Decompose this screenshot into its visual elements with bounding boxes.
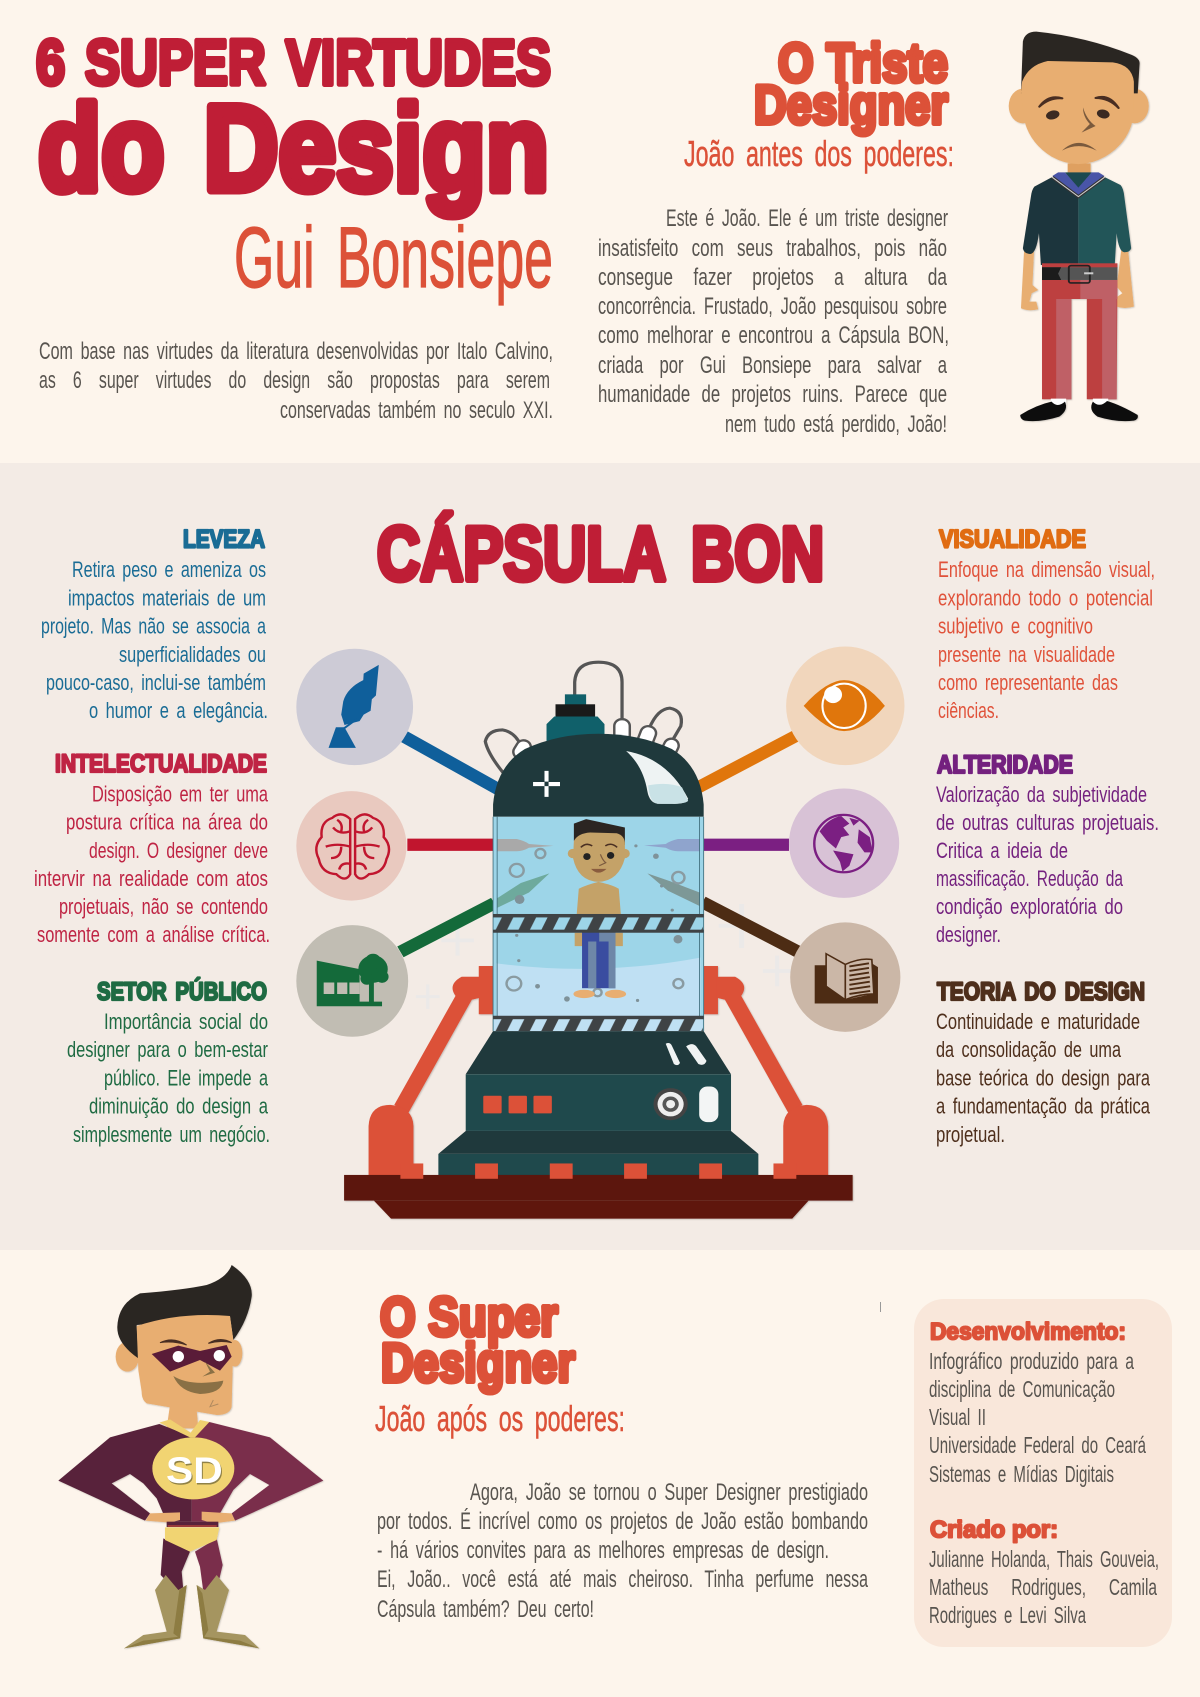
virtue: Leveza bbox=[41, 526, 268, 723]
description: intervir na realidade com atos bbox=[34, 866, 268, 891]
connector: setor público bbox=[400, 903, 494, 952]
chest emblem: SD bbox=[166, 1449, 223, 1491]
sweater bbox=[1023, 172, 1131, 265]
ears bbox=[116, 1340, 242, 1372]
illustration: Capsule BON machine with icons bbox=[296, 647, 904, 1219]
description: designer. bbox=[936, 922, 1001, 947]
intro paragraph: Com base nas virtudes da literatura desenvolvidas por Italo Calvino, bbox=[39, 338, 553, 365]
virtue: Setor Público bbox=[67, 976, 270, 1147]
heading: Desenvolvimento: Desenvolvimento: bbox=[930, 1318, 1126, 1346]
trousers bbox=[1042, 263, 1117, 399]
story paragraph: sad designer: nem tudo está perdido, João! bbox=[725, 411, 947, 438]
mask and features bbox=[152, 1339, 232, 1407]
legs bbox=[161, 1538, 223, 1592]
story paragraph: sad designer bbox=[598, 205, 949, 438]
heading: INTELECTUALIDADE bbox=[55, 750, 267, 778]
heading: TEORIA DO DESIGN bbox=[937, 978, 1145, 1006]
band: capsule section background bbox=[0, 463, 1200, 1250]
description bbox=[41, 557, 268, 723]
description: Critica a ideia de bbox=[936, 838, 1068, 863]
story paragraph: super designer bbox=[377, 1479, 868, 1623]
icon circle: eye bbox=[786, 647, 904, 765]
hazard band lower bbox=[493, 1016, 704, 1031]
belt and briefs bbox=[165, 1522, 219, 1552]
description: Disposição em ter uma bbox=[92, 781, 269, 806]
heading: O Super Designer: Designer bbox=[381, 1332, 575, 1394]
description bbox=[936, 1009, 1151, 1147]
story paragraph: super designer: - há vários convites para as melhores empresas de design. bbox=[377, 1537, 829, 1564]
dial bbox=[653, 1088, 688, 1120]
description bbox=[67, 1009, 270, 1147]
story paragraph: sad designer: Este é João. Ele é um triste designer bbox=[666, 205, 948, 232]
description: projeto. Mas não se associa a bbox=[41, 614, 267, 639]
belt bbox=[1042, 266, 1117, 283]
neck bbox=[1068, 163, 1091, 178]
icon circle: brain bbox=[296, 791, 407, 901]
connectors bbox=[400, 736, 798, 952]
highlights bbox=[666, 1043, 707, 1065]
description: postura crítica na área do bbox=[66, 810, 268, 835]
cables and plugs bbox=[485, 662, 681, 776]
description: designer para o bem-estar bbox=[67, 1037, 268, 1062]
description: público. Ele impede a bbox=[104, 1065, 269, 1090]
description: projetual. bbox=[936, 1122, 1005, 1147]
glass edges bbox=[493, 817, 704, 1031]
heading: O Super Designer bbox=[380, 1286, 575, 1394]
virtue: Visualidade bbox=[938, 526, 1155, 723]
heading: Criado por: Criado por: bbox=[930, 1516, 1058, 1544]
face bbox=[137, 1315, 233, 1415]
glass chamber bbox=[493, 817, 704, 1031]
machine body bbox=[438, 1031, 758, 1176]
left arm bbox=[369, 966, 493, 1176]
white switch bbox=[699, 1087, 718, 1122]
ears bbox=[1009, 89, 1149, 123]
collar bbox=[159, 1419, 209, 1437]
right arm bbox=[703, 966, 828, 1176]
shoes bbox=[1020, 399, 1138, 421]
title block bbox=[36, 26, 553, 306]
description: projetuais, não se contendo bbox=[59, 894, 268, 919]
orange tabs bbox=[400, 1163, 796, 1179]
story paragraph: sad designer: insatisfeito com seus trabalhos, pois não bbox=[598, 235, 947, 262]
title line 1: 6 SUPER VIRTUDES bbox=[36, 26, 551, 98]
story paragraph: sad designer: consegue fazer projetos a altura da bbox=[598, 264, 947, 291]
description: massificação. Redução da bbox=[936, 866, 1124, 891]
boots bbox=[124, 1575, 259, 1648]
needles bbox=[497, 839, 700, 908]
small tick mark bbox=[880, 1302, 881, 1312]
heading: SETOR PÚBLICO bbox=[97, 976, 267, 1006]
description: simplesmente um negócio. bbox=[73, 1122, 270, 1147]
dome bbox=[493, 734, 704, 817]
icon circle: open book bbox=[790, 922, 900, 1032]
connector: alteridade bbox=[702, 829, 789, 861]
João inside the capsule bbox=[568, 819, 630, 998]
hair bbox=[117, 1265, 252, 1358]
development text bbox=[929, 1348, 1146, 1487]
description: o humor e a elegância. bbox=[89, 698, 268, 723]
story paragraph: super designer: Agora, João se tornou o Super Designer prestigiado bbox=[470, 1479, 868, 1506]
heading: LEVEZA bbox=[183, 526, 265, 554]
description: presente na visualidade bbox=[938, 642, 1115, 667]
torso and arms bbox=[58, 1422, 323, 1522]
title line 2: do Design bbox=[38, 80, 549, 216]
connector: visualidade bbox=[698, 736, 796, 787]
description: Continuidade e maturidade bbox=[936, 1009, 1140, 1034]
description: impactos materiais de um bbox=[68, 585, 266, 610]
description: da consolidação de uma bbox=[936, 1037, 1122, 1062]
authors text: Rodrigues e Levi Silva bbox=[929, 1602, 1086, 1628]
virtue: Teoria do Design bbox=[936, 978, 1151, 1147]
heading: O Triste Designer: O Triste bbox=[778, 32, 948, 94]
intro paragraph: as 6 super virtudes do design são propostas para serem bbox=[39, 367, 550, 394]
virtue: Intelectualidade bbox=[34, 750, 270, 947]
icon circle: globe bbox=[789, 788, 899, 898]
authors text bbox=[929, 1546, 1159, 1628]
description bbox=[938, 557, 1155, 723]
description bbox=[936, 782, 1159, 947]
heading: VISUALIDADE bbox=[939, 526, 1086, 554]
panel: credits bbox=[914, 1299, 1172, 1647]
subheading after powers: João após os poderes: bbox=[375, 1398, 625, 1439]
icon circle: factory and tree bbox=[296, 925, 408, 1037]
orange support arms bbox=[369, 966, 828, 1176]
description: Importância social do bbox=[104, 1009, 268, 1034]
description: Retira peso e ameniza os bbox=[72, 557, 266, 582]
heading: O Super Designer: O Super bbox=[380, 1286, 558, 1348]
story paragraph: super designer: por todos. É incrível como os projetos de João estão bombando bbox=[377, 1508, 868, 1535]
intro paragraph: conservadas também no seculo XXI. bbox=[280, 397, 553, 424]
bubbles bbox=[507, 849, 684, 996]
development text: Visual II bbox=[929, 1404, 986, 1430]
description: design. O designer deve bbox=[89, 838, 268, 863]
description: como representante das bbox=[938, 670, 1118, 695]
description: pouco-caso, inclui-se também bbox=[46, 670, 266, 695]
connector: intelectualidade bbox=[407, 829, 494, 861]
intro paragraph bbox=[39, 338, 553, 424]
subheading before powers: João antes dos poderes: bbox=[684, 133, 954, 174]
story paragraph: super designer: Cápsula também? Deu certo! bbox=[377, 1596, 594, 1623]
hazard band upper bbox=[493, 914, 704, 933]
description: superficialidades ou bbox=[119, 642, 266, 667]
forearms bbox=[1021, 250, 1134, 310]
story paragraph: super designer: Ei, João.. você está até mais cheiroso. Tinha perfume nessa bbox=[377, 1566, 868, 1593]
story paragraph: sad designer: como melhorar e encontrou a Cápsula BON, bbox=[598, 322, 949, 349]
facial features bbox=[1039, 97, 1119, 151]
description: diminuição do design a bbox=[89, 1094, 269, 1119]
description: somente com a análise crítica. bbox=[37, 922, 270, 947]
chest emblem bbox=[152, 1437, 234, 1499]
heading: O Triste Designer: Designer bbox=[754, 74, 948, 136]
description: ciências. bbox=[938, 698, 999, 723]
heading: O Triste Designer bbox=[754, 32, 948, 136]
description: condição exploratória do bbox=[936, 894, 1123, 919]
author name: Gui Bonsiepe bbox=[234, 210, 553, 306]
neck bbox=[167, 1405, 198, 1428]
hair bbox=[1021, 32, 1140, 93]
description: subjetivo e cognitivo bbox=[938, 614, 1093, 639]
story paragraph: sad designer: humanidade de projetos ruins. Parece que bbox=[598, 381, 947, 408]
chest emblem: SD bbox=[167, 1450, 224, 1492]
face bbox=[1021, 61, 1134, 164]
heading: ALTERIDADE bbox=[937, 751, 1073, 779]
top cap bbox=[547, 694, 604, 743]
story paragraph: sad designer: criada por Gui Bonsiepe para salvar a bbox=[598, 352, 947, 379]
connector: leveza bbox=[404, 737, 498, 789]
background sparkles bbox=[416, 904, 791, 1009]
illustration: Super Designer bbox=[58, 1265, 323, 1648]
section title: Cápsula BON: CÁPSULA BON bbox=[377, 512, 824, 597]
virtue: Alteridade bbox=[936, 751, 1159, 947]
hands bbox=[146, 1512, 235, 1523]
story paragraph: sad designer: concorrência. Frustado, João pesquisou sobre bbox=[598, 293, 947, 320]
illustration: sad designer João bbox=[1009, 32, 1149, 421]
base platform bbox=[344, 1175, 853, 1219]
description bbox=[34, 781, 270, 947]
connector: teoria bbox=[702, 902, 798, 952]
icon circle: feather bbox=[296, 649, 413, 765]
control buttons bbox=[483, 1096, 552, 1113]
